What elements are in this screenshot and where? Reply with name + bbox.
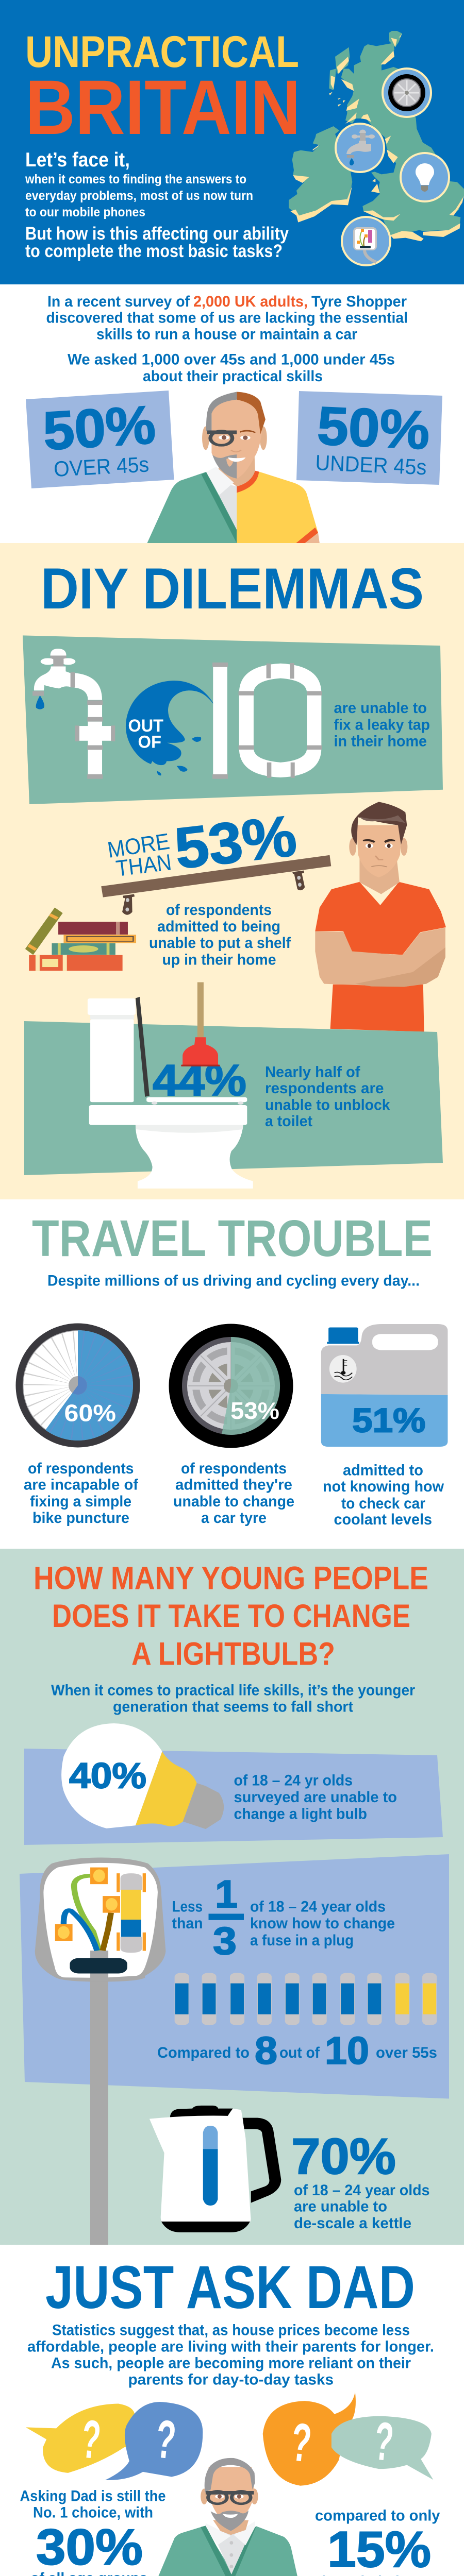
label: out of: OF [138,733,161,752]
stat: 40%: 40% [69,1756,146,1796]
stat: more than 53%: MORE [106,829,171,863]
label: out of: OUT [128,716,163,736]
caption: de-scale a kettle [294,2215,411,2232]
panel: under 45s: UNDER 45s [315,450,427,479]
caption: a toilet [265,1113,312,1130]
cream coastline [290,33,464,241]
intro copy: to our mobile phones [25,205,145,219]
stat: more than 53% [106,803,300,882]
intro copy: to complete the most basic tasks? [25,241,283,261]
icon: plug badge [341,216,391,266]
subheading [51,1682,415,1715]
stat: less than one third: a fuse in a plug [250,1932,354,1949]
stat: 70%: 70% [291,2128,396,2184]
caption: change a light bulb [234,1805,367,1823]
icon: open plug [35,1857,165,1982]
panel: over 45s: 50% [41,395,157,462]
Scottish islands [329,31,402,90]
stat: less than one third: than [172,1915,203,1932]
subheading: generation that seems to fall short [113,1698,353,1715]
icon: bulb badge [400,152,450,202]
icon: tyre badge [382,67,432,118]
caption: coolant levels: not knowing how [323,1478,444,1495]
speech bubbles: ? [372,2411,396,2473]
caption: coolant levels: admitted to [343,1462,423,1479]
intro copy: Statistics suggest that, as house prices become less [52,2322,410,2339]
section: DIY dilemmas [0,543,464,1199]
survey description: skills to run a house or maintain a car [96,326,357,343]
survey description: We asked 1,000 over 45s and 1,000 under 45s [68,351,395,368]
survey description: discovered that some of us are lacking the essential [46,309,408,327]
panel background [20,1854,449,2099]
caption [149,902,291,969]
icon: coolant can 51% [321,1324,448,1447]
stat: 44%: 44% [153,1056,246,1105]
stat: less than one third: 3 [213,1919,237,1962]
stat: asking dad 30%: No. 1 choice, with [33,2504,153,2521]
caption: bike puncture: are incapable of [24,1477,139,1493]
stat: asking dad 30%: Asking Dad is still the [20,2487,166,2505]
caption: admitted to being [157,918,280,935]
stat: asking dad 30% [20,2487,166,2576]
label: out of [128,716,163,752]
caption: are unable to [334,700,427,717]
subheading: When it comes to practical life skills, it’s the younger [51,1682,415,1699]
stat: more than 53%: THAN [114,850,173,882]
intro copy [25,149,289,261]
chart: car tyre 53% [169,1324,293,1448]
stat: less than one third: Less [172,1899,203,1916]
caption: car tyre [173,1460,294,1527]
heading [34,1561,428,1672]
panel: under 45s: 50% [316,396,431,461]
icon: tap badge [335,123,385,173]
stat: 8 out of 10 [157,2029,437,2072]
intro copy: parents for day-to-day tasks [128,2371,334,2388]
stat: less than one third: know how to change [250,1915,395,1932]
pipe illustration: 1 out of 10 [32,649,322,779]
panel: unblock a toilet [24,982,443,1189]
caption: bike puncture: fixing a simple [30,1493,131,1510]
caption: unable to put a shelf [149,935,291,952]
caption: are unable to [294,2198,387,2215]
figure: dad [156,2458,300,2576]
icon: kettle [150,2106,281,2232]
stat: 8 out of 10: out of [279,2044,320,2061]
icon: coolant can 51%: 51% [352,1401,426,1439]
caption: car tyre: of respondents [181,1460,287,1477]
survey description: about their practical skills [143,368,323,385]
caption [265,1064,390,1130]
section background [0,543,464,1199]
caption: coolant levels [323,1462,444,1528]
shelf and brackets [101,855,331,915]
section: travel trouble [15,1210,448,1528]
intro copy: As such, people are becoming more reliant on their [51,2355,411,2372]
subheading: Despite millions of us driving and cycling every day... [47,1272,420,1289]
stat: 8 out of 10: Compared to [157,2044,250,2061]
panel background [24,1021,443,1175]
caption: of respondents [166,902,272,919]
speech bubbles: ? [153,2409,178,2471]
panel: under 45s [296,391,442,485]
stat: more than 53%: 53% [172,803,300,881]
survey description: Tyre Shopper [311,293,407,310]
panel: over 45s [26,391,174,488]
intro copy: everyday problems, most of us now turn [25,189,253,203]
map of Britain and Ireland [289,31,464,241]
Ireland [289,126,352,217]
intro copy: Let’s face it, [25,149,130,171]
stat: asking dad 30%: 30% [36,2519,143,2575]
caption: of 18 – 24 year olds [294,2182,430,2199]
stat: less than one third: 1 [215,1872,238,1916]
panel background [23,635,443,804]
caption: up in their home [162,951,276,969]
figure: half old half young man [147,392,320,543]
chart: car tyre 53%: 53% [230,1397,279,1424]
caption [334,700,430,750]
stat: less than one third [172,1872,395,1962]
intro copy: affordable, people are living with their parents for longer. [27,2338,434,2355]
title line two: BRITAIN [25,64,301,150]
intro copy [27,2322,434,2388]
panel: light bulb [24,1723,443,1845]
caption: bike puncture: of respondents [28,1460,134,1477]
section: header [0,0,464,284]
intro copy: But how is this affecting our ability [25,224,289,244]
speech bubbles: ? [78,2409,103,2471]
panel: shelf statistic [25,802,446,1032]
panel: fuse in a plug [20,1854,449,2245]
caption: respondents are [265,1080,384,1097]
section: just ask dad [20,2253,446,2576]
section: survey intro [26,293,442,543]
icon: stack of books [25,907,136,971]
caption: car tyre: admitted they're [175,1477,292,1493]
caption: of 18 – 24 yr olds [234,1772,353,1789]
panel background [24,1749,443,1845]
caption: unable to unblock [265,1096,390,1114]
survey description: In a recent survey of [47,293,190,310]
stat: 8 out of 10: over 55s [376,2044,437,2061]
caption: coolant levels: to check car [341,1495,425,1512]
caption: car tyre: unable to change [173,1493,294,1510]
caption: bike puncture: bike puncture [32,1510,129,1527]
heading: A LIGHTBULB? [131,1636,335,1672]
figure: man with crossed arms [315,802,446,1032]
caption: bike puncture [24,1460,139,1527]
speech bubbles: ? [288,2412,314,2474]
heading: DIY DILEMMAS [41,556,424,621]
section background [0,1549,464,2245]
icon: plug cable [90,1951,108,2245]
chart: bike wheel 60%: 60% [64,1400,116,1427]
panel: kettle [150,2106,430,2232]
icon: light bulb [61,1723,224,1829]
stat: 8 out of 10: 10 [325,2029,369,2072]
speech bubbles [26,2392,433,2486]
panel: leaky tap [23,635,443,804]
chart: ten fuses [175,1973,437,2025]
caption: surveyed are unable to [234,1789,397,1806]
header background [0,0,464,284]
stat: asking mum 15%: compared to only [315,2507,440,2524]
caption: car tyre: a car tyre [201,1510,267,1527]
stat: asking mum 15% [310,2507,445,2576]
panel: over 45s: OVER 45s [53,452,150,481]
caption: fix a leaky tap [334,717,430,734]
title line one: UNPRACTICAL [25,27,299,77]
survey description [46,293,408,385]
survey description: 2,000 UK adults, [193,293,308,310]
intro copy: when it comes to finding the answers to [25,172,246,187]
caption [234,1772,397,1823]
icon: toilet and plunger [88,982,253,1189]
caption [294,2182,430,2232]
caption: coolant levels: coolant levels [334,1511,432,1528]
chart: bike wheel 60% [15,1323,140,1448]
stat: 8 out of 10: 8 [255,2029,277,2072]
stat: asking mum 15%: 15% [327,2521,431,2576]
Great Britain [341,43,464,235]
stat: less than one third: of 18 – 24 year olds [250,1899,386,1916]
caption: Nearly half of [265,1064,360,1081]
caption: in their home [334,733,427,750]
section: young people [0,1549,464,2245]
